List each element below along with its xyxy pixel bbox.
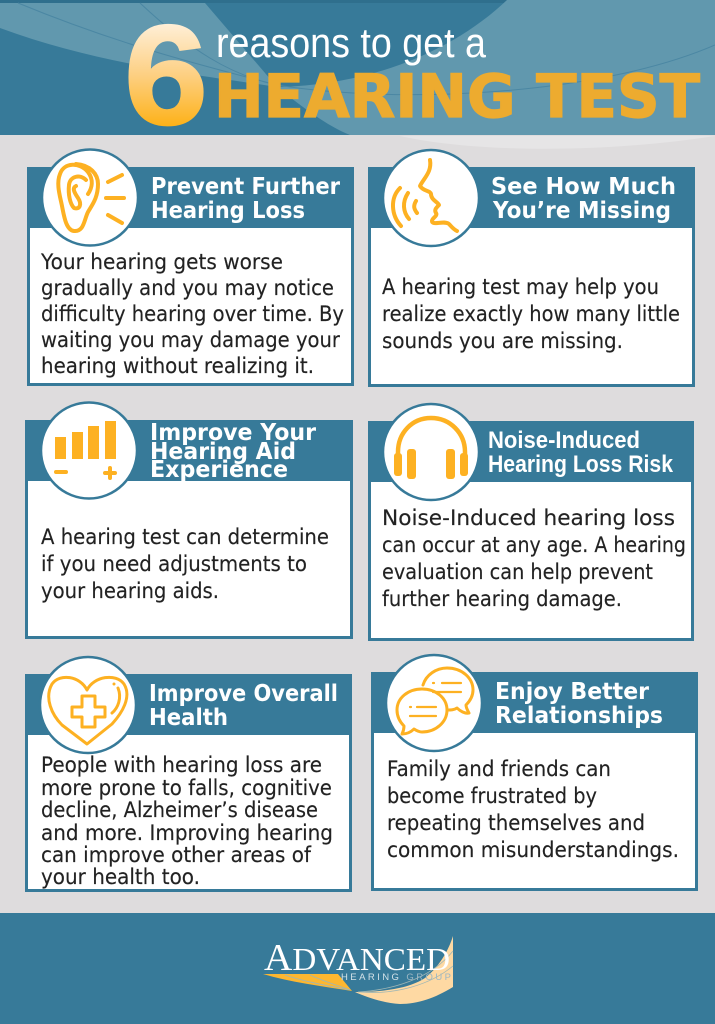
panel: improve your hearing aid experience <box>25 402 353 638</box>
panel: prevent further hearing loss <box>27 150 354 384</box>
heading: Relationships <box>495 703 663 729</box>
icon: ear <box>42 150 138 246</box>
body text <box>41 753 333 890</box>
heading: See How Much <box>491 174 676 200</box>
body text: further hearing damage. <box>382 587 622 612</box>
body text: A hearing test can determine <box>41 525 329 550</box>
icon: speech bubbles <box>386 655 482 751</box>
icon: headphones <box>383 404 479 500</box>
heading: Improve Your <box>150 420 317 446</box>
body text: Noise-Induced hearing loss <box>382 506 675 531</box>
heading: Hearing Aid <box>150 439 296 465</box>
panel: see how much you're missing <box>368 150 695 386</box>
title line 2: HEARING TEST <box>214 62 700 132</box>
body text: your health too. <box>41 865 200 890</box>
body text: and more. Improving hearing <box>41 821 333 846</box>
heading <box>149 681 338 731</box>
body text: become frustrated by <box>387 784 597 809</box>
heading <box>151 174 341 224</box>
icon: volume bars <box>41 402 137 498</box>
body text: hearing without realizing it. <box>41 354 314 379</box>
body text: difficulty hearing over time. By <box>41 302 344 327</box>
body text: realize exactly how many little <box>382 302 680 327</box>
body text <box>40 250 344 379</box>
body text: common misunderstandings. <box>387 838 679 863</box>
heading <box>488 427 674 478</box>
heading <box>495 679 663 729</box>
body text: waiting you may damage your <box>41 328 340 353</box>
body text: People with hearing loss are <box>41 753 322 778</box>
body text: repeating themselves and <box>387 811 645 836</box>
body text: decline, Alzheimer’s disease <box>41 798 318 823</box>
body text: evaluation can help prevent <box>382 560 653 585</box>
body text: gradually and you may notice <box>41 276 334 301</box>
heading: Health <box>149 705 228 731</box>
heading: Hearing Loss Risk <box>488 451 674 478</box>
heading: Improve Overall <box>149 681 338 707</box>
footer band <box>0 913 715 1024</box>
title line 1: reasons to get a <box>216 19 487 66</box>
body text: more prone to falls, cognitive <box>41 776 332 801</box>
body text <box>387 757 679 863</box>
panel: noise-induced hearing loss risk <box>368 404 694 640</box>
body text: can improve other areas of <box>41 843 311 868</box>
heading: Experience <box>150 457 288 483</box>
body text <box>41 525 329 604</box>
body text: if you need adjustments to <box>41 552 307 577</box>
header banner <box>0 0 715 155</box>
panel: improve overall health <box>25 657 352 890</box>
heading: Enjoy Better <box>495 679 650 705</box>
icon: speaking face <box>383 150 479 246</box>
title number 6: 6 <box>124 0 208 155</box>
body text <box>382 275 680 354</box>
heading: Hearing Loss <box>151 198 305 224</box>
panel: enjoy better relationships <box>371 655 698 890</box>
heading: Prevent Further <box>151 174 341 200</box>
icon: heart with cross <box>40 657 136 753</box>
body text: A hearing test may help you <box>382 275 659 300</box>
heading: You’re Missing <box>492 198 671 224</box>
logo: Advanced Hearing Group: ADVANCED <box>264 937 450 979</box>
body text: Your hearing gets worse <box>40 250 283 275</box>
logo: Advanced Hearing Group <box>263 936 453 1004</box>
heading <box>150 420 317 483</box>
body text: Family and friends can <box>387 757 611 782</box>
logo: Advanced Hearing Group: HEARING GROUP <box>341 972 451 983</box>
heading: Noise-Induced <box>488 427 640 454</box>
body text: sounds you are missing. <box>382 329 623 354</box>
body text: your hearing aids. <box>41 579 219 604</box>
body text <box>382 506 686 612</box>
heading <box>491 174 676 224</box>
